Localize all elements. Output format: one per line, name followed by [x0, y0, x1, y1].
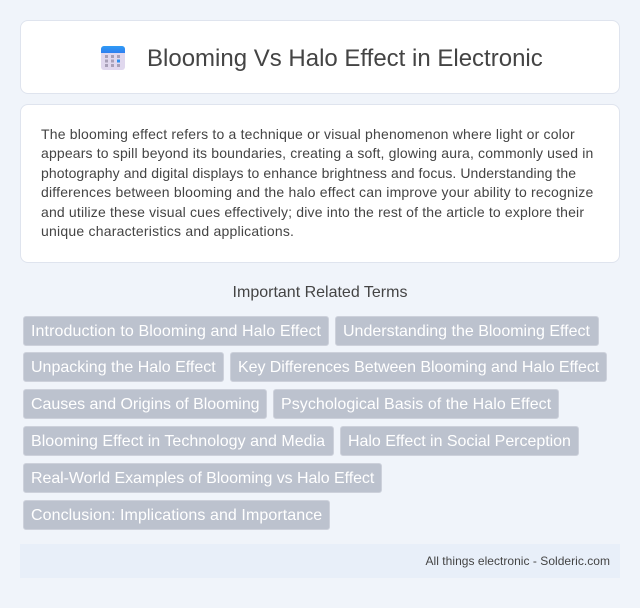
tag	[23, 426, 334, 456]
heading: important related terms: Important Related Terms	[233, 284, 407, 301]
tag: Real-World Examples of Blooming vs Halo Effect	[31, 470, 374, 487]
tag: Key Differences Between Blooming and Halo Effect	[238, 359, 599, 376]
tag	[335, 316, 599, 346]
footer bar	[20, 544, 620, 578]
intro text: photography and digital displays to enhance brightness and focus. Understanding the	[41, 165, 576, 181]
tag: Psychological Basis of the Halo Effect	[281, 396, 551, 413]
title: Blooming Vs Halo Effect in Electronic	[147, 45, 543, 72]
tag: Understanding the Blooming Effect	[343, 323, 590, 340]
tag	[23, 389, 267, 419]
tag	[340, 426, 579, 456]
tag: Introduction to Blooming and Halo Effect	[31, 323, 321, 340]
tag: Causes and Origins of Blooming	[31, 396, 260, 413]
intro text: differences between blooming and the halo effect can improve your ability to recognize	[41, 184, 593, 200]
intro text panel	[20, 104, 620, 263]
tag	[23, 316, 329, 346]
tag: Conclusion: Implications and Importance	[31, 507, 322, 524]
intro text	[41, 126, 593, 239]
tag	[230, 352, 607, 382]
tag	[23, 463, 382, 493]
tag: Unpacking the Halo Effect	[31, 359, 216, 376]
tag	[273, 389, 559, 419]
intro text: and utilize these visual cues effectively; dive into the rest of the article to explore their	[41, 204, 584, 220]
footer text: All things electronic - Solderic.com	[426, 554, 610, 568]
icon: calendar	[101, 46, 125, 70]
tag	[23, 352, 224, 382]
intro text: appears to spill beyond its boundaries, creating a soft, glowing aura, commonly used in	[41, 145, 593, 161]
header panel	[20, 20, 620, 94]
intro text: The blooming effect refers to a technique or visual phenomenon where light or color	[41, 126, 575, 142]
tag: Halo Effect in Social Perception	[348, 433, 571, 450]
tag: Blooming Effect in Technology and Media	[31, 433, 325, 450]
tag	[23, 500, 330, 530]
intro text: unique characteristics and applications.	[41, 223, 294, 239]
related terms tags	[23, 316, 607, 530]
